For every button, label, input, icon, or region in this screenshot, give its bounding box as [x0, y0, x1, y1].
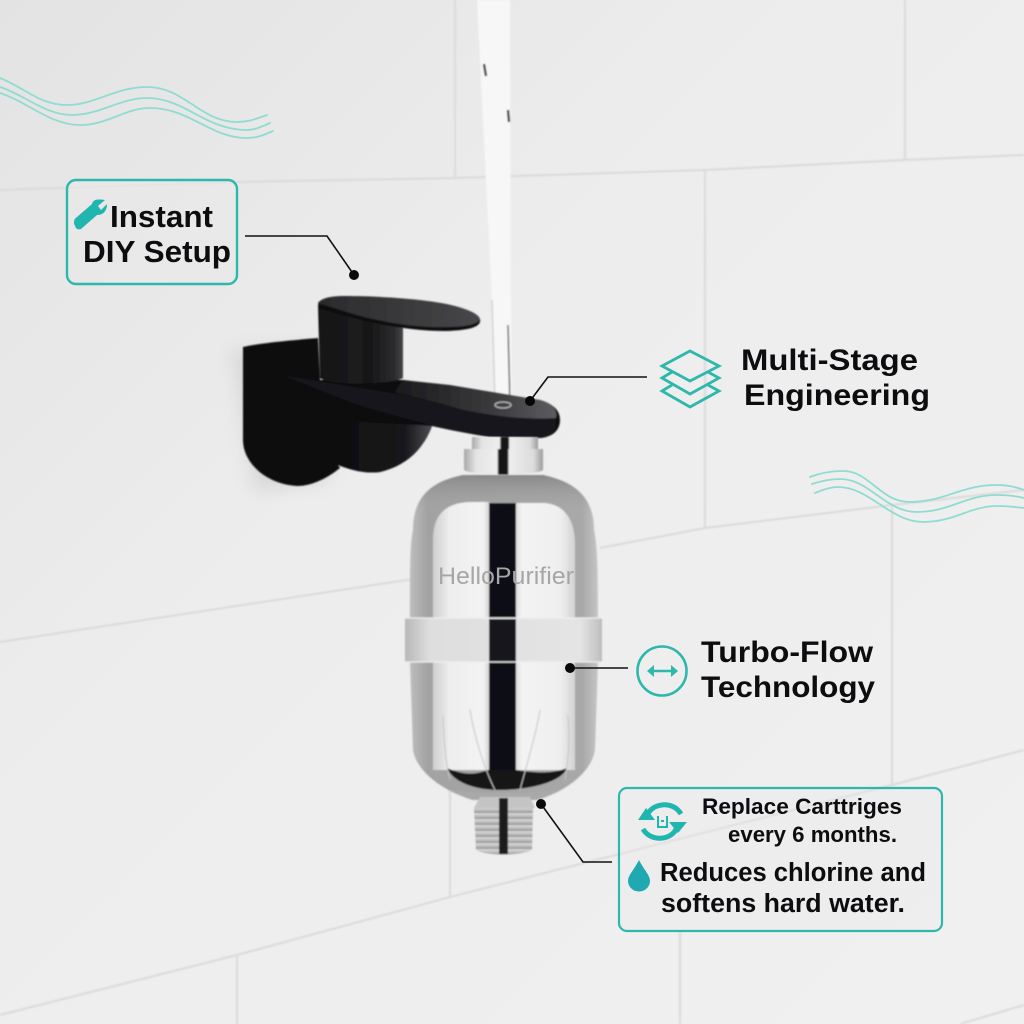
filter outlet nut [474, 797, 535, 808]
faucet silhouette: plate, spout and underside [243, 338, 560, 486]
text: softens hard water: softens hard water. [661, 890, 905, 918]
faucet lever [318, 296, 480, 330]
faucet underside highlight [338, 420, 432, 473]
filter upper collar [472, 437, 538, 449]
leader line: turbo-flow [565, 663, 628, 673]
filter cartridge [400, 437, 610, 854]
decorative wave top left [0, 78, 273, 138]
aerator ring [495, 402, 511, 408]
text: reduces chlorine: Reduces chlorine and [660, 859, 926, 887]
text: replace cartridges: Replace Carttriges [702, 794, 902, 819]
leader line: setup [245, 236, 359, 280]
icon: stacked layers [662, 351, 719, 407]
callout: maintenance [619, 788, 942, 931]
faucet [243, 296, 560, 486]
text: every 6 months: every 6 months. [728, 822, 897, 847]
heading: turbo-flow technology: Technology [701, 671, 875, 704]
soft wall shadow [232, 345, 330, 492]
icon: replace cycle [638, 805, 687, 838]
heading: DIY setup: DIY Setup [83, 234, 231, 269]
heading: multi-stage engineering [741, 344, 930, 412]
heading: turbo-flow technology [701, 636, 875, 704]
chrome body [400, 470, 610, 810]
heading: multi-stage engineering: Engineering [744, 379, 930, 412]
heading: instant: Instant [110, 199, 213, 234]
faucet spout front face [285, 376, 556, 438]
water stream [477, 0, 512, 408]
callout: instant DIY setup [67, 180, 237, 284]
icon: wrench [74, 199, 107, 229]
faucet handle body [318, 305, 403, 383]
leader line: bottom callout [536, 799, 612, 862]
faucet spout top surface [395, 380, 556, 418]
leader line: multi-stage [525, 377, 647, 406]
filter neck [464, 449, 543, 474]
filter threaded outlet [474, 808, 533, 854]
icon: flow arrows [638, 646, 686, 696]
brand text: HelloPurifier [438, 563, 574, 590]
heading: turbo-flow technology: Turbo-Flow [701, 636, 874, 669]
heading: multi-stage engineering: Multi-Stage [741, 344, 918, 377]
decorative wave right [810, 471, 1024, 522]
icon: water drop [628, 860, 650, 892]
